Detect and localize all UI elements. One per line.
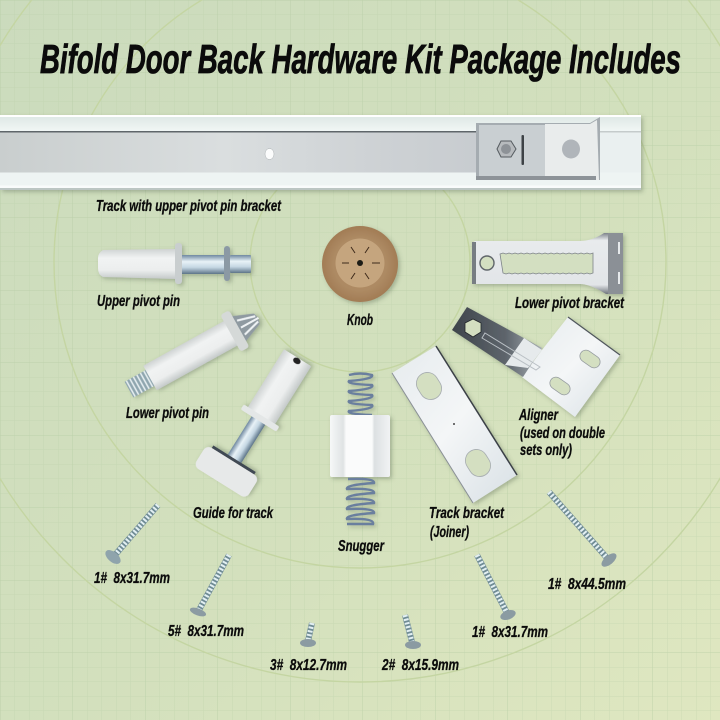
label: track bracket: [429, 505, 505, 541]
aligner: [452, 307, 620, 417]
knob: [322, 226, 398, 302]
track bracket (joiner): [392, 346, 517, 503]
label: screw 1# left: 1# 8x31.7mm: [94, 570, 170, 587]
upper pivot pin: [98, 243, 251, 284]
lower pivot bracket: [472, 233, 623, 294]
label: track: Track with upper pivot pin bracket: [96, 198, 282, 215]
label: track bracket: Track bracket: [429, 505, 505, 522]
screw: 1# 8x31.7mm left: [103, 505, 158, 567]
label: track bracket: (Joiner): [430, 524, 469, 541]
label: aligner: [518, 407, 605, 459]
label: screw 1# long: 1# 8x44.5mm: [548, 576, 626, 593]
label: aligner: (used on double: [520, 425, 605, 442]
screw: 3# 8x12.7mm: [300, 623, 316, 647]
label: lower pivot pin: Lower pivot pin: [126, 405, 209, 422]
screw: 1# 8x44.5mm: [549, 492, 619, 569]
screw: 1# 8x31.7mm right: [477, 555, 517, 622]
upper pivot pin bracket: [476, 117, 600, 180]
label: aligner: sets only): [520, 442, 572, 459]
label: guide for track: Guide for track: [193, 505, 274, 522]
label: aligner: Aligner: [518, 407, 559, 424]
screw: 2# 8x15.9mm: [405, 615, 421, 649]
track with upper pivot pin bracket: [0, 115, 641, 190]
label: upper pivot pin: Upper pivot pin: [97, 293, 180, 310]
label: screw 3#: 3# 8x12.7mm: [270, 657, 347, 674]
screw: 5# 8x31.7mm: [189, 555, 229, 618]
label: snugger: Snugger: [338, 538, 385, 555]
label: screw 1# right: 1# 8x31.7mm: [472, 624, 548, 641]
label: knob: Knob: [347, 312, 373, 329]
label: screw 2#: 2# 8x15.9mm: [381, 657, 459, 674]
guide for track: [193, 341, 324, 499]
lower pivot pin: [119, 300, 269, 408]
label: screw 5#: 5# 8x31.7mm: [168, 623, 244, 640]
label: lower pivot bracket: Lower pivot bracket: [515, 295, 625, 312]
snugger: [330, 374, 390, 524]
